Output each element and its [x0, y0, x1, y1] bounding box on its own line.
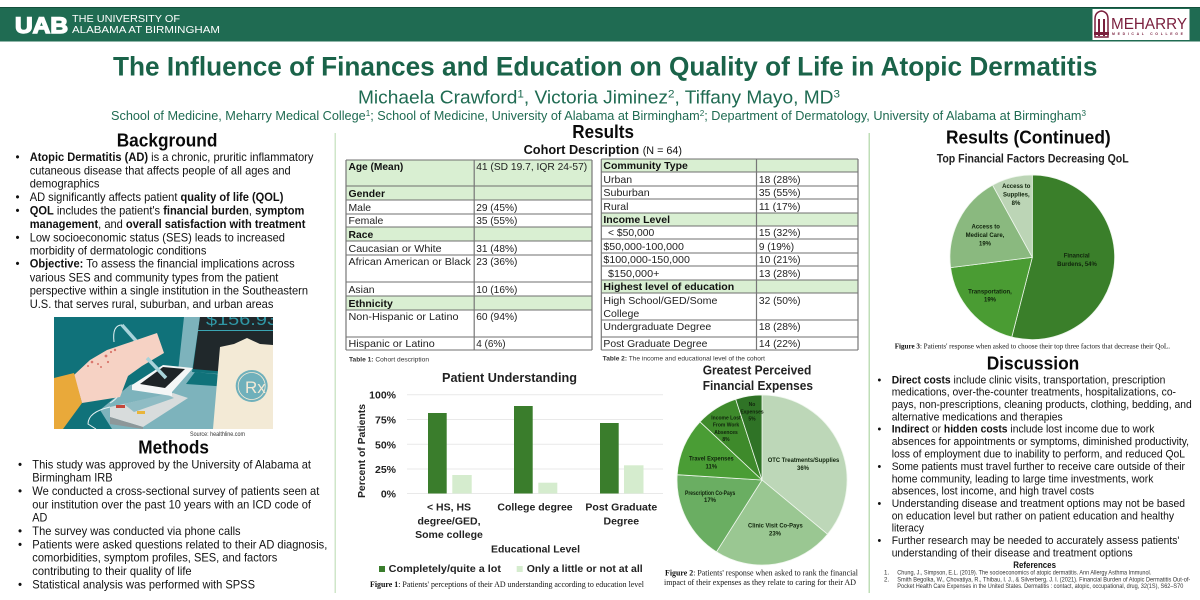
title: The Influence of Finances and Education on Quality of Life in Atopic Dermatitis [113, 51, 1098, 81]
illustration: paying at pharmacy terminal: $156.93 [206, 310, 278, 329]
heading: background: Background [117, 131, 217, 151]
background bullets: QOL includes the patient's financial burden, symptom [30, 204, 304, 217]
table 2: income and education: 13 (28%) [759, 268, 800, 280]
pie 3 labels: 19% [979, 241, 992, 247]
x axis category labels: College degree [497, 502, 573, 514]
pie labels: 23% [769, 532, 782, 538]
bar chart: patient understanding [356, 370, 663, 575]
UAB logo: ALABAMA AT BIRMINGHAM [72, 25, 220, 36]
pie 3 labels: Supplies, [1003, 192, 1030, 198]
panel: results [346, 122, 859, 589]
figure 3 caption: Figure 3: Patients' response when asked to choose their top three factors that decrease their QoL. [895, 342, 1170, 351]
table 2: income and education: 11 (17%) [759, 201, 800, 213]
pie 3 labels: Access to [1002, 184, 1031, 190]
authors: Michaela Crawford [358, 87, 508, 107]
table 2: income and education: Highest level of education [603, 281, 734, 293]
y axis labels: 0% [381, 488, 397, 500]
table 2: income and education: 18 (28%) [759, 174, 800, 186]
table 1: cohort description: Caucasian or White [348, 243, 442, 255]
authors: 1 [517, 88, 524, 100]
authors: , Victoria Jiminez [524, 87, 668, 107]
discussion bullets: literacy [892, 523, 925, 535]
pie labels: 17% [704, 498, 717, 504]
methods bullets: • [18, 538, 22, 551]
background bullets: demographics [30, 178, 100, 191]
Meharry logo [1092, 9, 1190, 40]
table 1: cohort description: African American or Black [348, 256, 472, 268]
pie labels: Absences [714, 430, 738, 436]
background bullets: cutaneous disease that affects people of all ages and [30, 164, 291, 177]
methods bullets: • [18, 458, 22, 471]
discussion bullets: Understanding disease and treatment options may not be based [892, 498, 1185, 510]
methods bullets: Patients were asked questions related to their AD diagnosis, [32, 538, 327, 551]
table 1: cohort description: Male [348, 202, 371, 214]
table 2: income and education: Rural [603, 201, 628, 213]
pie chart: greatest perceived financial expenses [677, 363, 847, 565]
table 1: cohort description: Age (Mean) [348, 161, 403, 173]
bars: only a little or not at all [452, 465, 644, 494]
table 2: income and education: 10 (21%) [759, 254, 800, 266]
legend: Only a little or not at all [527, 563, 643, 575]
pie 3 labels: Transportation, [968, 289, 1012, 295]
pie 3 labels: Access to [972, 224, 1000, 230]
discussion bullets: absences for appointments or symptoms, diminished productivity, [892, 436, 1189, 448]
methods bullets: Statistical analysis was performed with SPSS [32, 578, 255, 591]
UAB logo [15, 13, 220, 38]
discussion bullets: • [878, 498, 882, 510]
pie labels: Travel Expenses [689, 457, 734, 463]
table 1: cohort description: Non-Hispanic or Latino [348, 311, 459, 323]
x axis category labels: < HS, HS [427, 502, 471, 514]
pie labels: 36% [797, 466, 810, 472]
pie 3 labels: 8% [1012, 201, 1021, 207]
discussion bullets: Indirect or hidden costs include lost income due to work [892, 424, 1155, 436]
background bullets: morbidity of dermatologic conditions [30, 245, 207, 258]
y axis labels: 100% [369, 390, 397, 402]
background bullets: Atopic Dermatitis (AD) is a chronic, pruritic inflammatory [30, 151, 314, 164]
background bullets: • [16, 231, 20, 244]
table 2: income and education: < $50,000 [608, 227, 654, 239]
pie slices [677, 395, 847, 565]
table 1: cohort description: Asian [348, 284, 375, 296]
table 2: income and education: 32 (50%) [759, 295, 800, 307]
discussion bullets: pays, non-prescriptions, cleaning products, clothing, bedding, and [892, 399, 1192, 411]
affiliations: 3 [1081, 109, 1087, 118]
discussion bullets: • [878, 374, 882, 386]
pie labels: Income Lost [711, 416, 741, 422]
discussion bullets: on education level but rather on patient education and healthy [892, 510, 1175, 522]
pie labels: Clinic Visit Co-Pays [748, 524, 803, 530]
x axis category labels: Degree [603, 516, 639, 528]
pie labels: Prescription Co-Pays [685, 491, 736, 497]
pie 3 labels [966, 184, 1098, 303]
pie chart: top financial factors decreasing QoL [950, 175, 1115, 340]
x axis title: Educational Level [491, 544, 580, 556]
discussion bullets: medications, over-the-counter treatments, hospitalizations, co- [892, 387, 1176, 399]
table 2: income and education: 18 (28%) [759, 321, 800, 333]
background bullets: • [16, 258, 20, 271]
table 1: cohort description: 41 (SD 19.7, IQR 24-57) [476, 161, 587, 173]
pie labels [685, 402, 840, 538]
discussion bullets: • [878, 461, 882, 473]
pie labels: No [749, 402, 755, 408]
table 1: cohort description: Gender [348, 188, 385, 200]
discussion bullets: alternative medications and therapies [892, 411, 1063, 423]
illustration: paying at pharmacy terminal [54, 310, 278, 429]
table 2: income and education: Undergraduate Degree [603, 321, 711, 333]
column divider left [334, 133, 336, 593]
legend [379, 563, 643, 575]
heading: discussion: Discussion [987, 353, 1079, 373]
heading: results: Results [572, 122, 634, 142]
pie title: Financial Expenses [703, 378, 813, 393]
table 1 caption: Table 1: Cohort description [349, 357, 429, 363]
table 2: income and education: 9 (19%) [759, 241, 794, 253]
authors: 3 [833, 88, 840, 100]
table 2: income and education: Income Level [603, 214, 670, 226]
y axis labels [369, 390, 397, 500]
affiliations: ; School of Medicine, University of Alabama at Birmingham [370, 109, 700, 123]
heading: results continued: Results (Continued) [946, 127, 1111, 147]
subheading: cohort description: Cohort Description (N = 64) [524, 142, 682, 157]
affiliations: 1 [366, 109, 371, 118]
background bullets: Low socioeconomic status (SES) leads to increased [30, 231, 285, 244]
methods bullets: comorbidities, symptom profiles, SES, and factors [32, 552, 277, 565]
UAB logo: UAB [15, 13, 68, 38]
discussion bullets: absences, lost income, and high travel costs [892, 486, 1094, 498]
background bullets: perspective within a single institution in the Southeastern [30, 285, 308, 298]
table 2: income and education: 35 (55%) [759, 187, 800, 199]
table 2: income and education: 15 (32%) [759, 227, 800, 239]
x axis category labels: degree/GED, [417, 516, 481, 528]
background bullets [16, 151, 314, 311]
methods bullets: • [18, 485, 22, 498]
authors: 2 [668, 88, 674, 100]
discussion bullets: • [878, 535, 882, 547]
table 1: cohort description: 10 (16%) [476, 284, 517, 296]
table 2: income and education: Post Graduate Degree [603, 338, 708, 350]
pie labels: 8% [722, 437, 730, 443]
background bullets: Objective: To assess the financial implications across [30, 258, 295, 271]
table 1: cohort description: Race [348, 229, 373, 241]
table 2: income and education: $100,000-150,000 [603, 254, 690, 266]
affiliations: ; Department of Dermatology, University of Alabama at Birmingham [704, 109, 1081, 123]
discussion bullets: Direct costs include clinic visits, transportation, prescription [892, 374, 1165, 386]
table 1: cohort description: 23 (36%) [476, 256, 517, 268]
reference list: Chung, J., Simpson, E.L. (2019). The socioeconomics of atopic dermatitis. Ann Allergy Asthma Immunol. [897, 570, 1152, 577]
table 2: income and education: $150,000+ [608, 268, 659, 280]
y axis title: Percent of Patients [356, 404, 368, 498]
affiliations: School of Medicine, Meharry Medical College [111, 109, 362, 123]
pie title: top financial factors: Top Financial Factors Decreasing QoL [937, 154, 1129, 166]
table 1: cohort description: 60 (94%) [476, 311, 517, 323]
table 2: income and education: Community Type [603, 160, 688, 172]
panel: results continued [895, 127, 1170, 351]
authors: , Tiffany Mayo, MD [674, 87, 833, 107]
table 2: income and education: High School/GED/Some [603, 295, 718, 307]
table 1: cohort description: 35 (55%) [476, 215, 517, 227]
methods bullets: The survey was conducted via phone calls [32, 525, 241, 538]
y axis labels: 25% [375, 464, 397, 476]
methods bullets: • [18, 578, 22, 591]
table 2: income and education: Suburban [603, 187, 650, 199]
y axis labels: 50% [375, 439, 397, 451]
methods bullets: We conducted a cross-sectional survey of patients seen at [32, 485, 320, 498]
table 2: income and education: 14 (22%) [759, 338, 800, 350]
discussion bullets: understanding of their disease and treatment options [892, 547, 1133, 559]
pie labels: 5% [748, 416, 756, 422]
background bullets: • [16, 151, 20, 164]
table 1: cohort description: 31 (48%) [476, 243, 517, 255]
x axis category labels [415, 502, 657, 541]
table 1: cohort description [346, 160, 592, 350]
y axis labels: 75% [375, 415, 397, 427]
heading: methods: Methods [138, 437, 209, 457]
background bullets: • [16, 191, 20, 204]
table 1: cohort description: Female [348, 215, 383, 227]
table 1: cohort description: 4 (6%) [476, 338, 506, 350]
panel: references [884, 560, 1190, 590]
panel: methods [18, 437, 327, 591]
figure 2 caption: Figure 2: Patients' response when asked to rank the financial [665, 568, 859, 578]
reference list: 1. [884, 570, 889, 577]
reference list: 2. [884, 576, 889, 583]
background bullets: various SES and community types from the patient [30, 271, 279, 284]
illustration: paying at pharmacy terminal: Rx [245, 378, 266, 397]
image source: Source: healthline.com [190, 432, 245, 438]
discussion bullets: Further research may be needed to accurately assess patients' [892, 535, 1179, 547]
heading: references: References [1013, 560, 1056, 570]
panel: background [16, 131, 314, 438]
methods bullets: AD [32, 512, 47, 525]
pie title: Greatest Perceived [703, 363, 811, 378]
pie labels: From Work [713, 423, 739, 429]
Meharry logo: MEDICAL COLLEGE [1112, 32, 1184, 36]
UAB logo: THE UNIVERSITY OF [72, 14, 180, 25]
Meharry logo: MEHARRY [1111, 16, 1187, 33]
table 2: income and education: $50,000-100,000 [603, 241, 684, 253]
methods bullets [18, 458, 327, 591]
panel: discussion [878, 353, 1192, 559]
pie 3 labels: Burdens, 54% [1057, 262, 1098, 268]
discussion bullets: • [878, 424, 882, 436]
bars: completely or quite a lot [428, 406, 619, 494]
background bullets: management, and overall satisfaction with treatment [30, 218, 306, 231]
pie 3 labels: 19% [984, 297, 997, 303]
header band [0, 7, 1200, 42]
figure 1 caption: Figure 1: Patients' perceptions of their AD understanding according to education level [370, 579, 645, 589]
methods bullets: • [18, 525, 22, 538]
pie labels: OTC Treatments/Supplies [768, 458, 840, 464]
table 1: cohort description: 29 (45%) [476, 202, 517, 214]
background bullets: U.S. that serves rural, suburban, and urban areas [30, 298, 274, 311]
methods bullets: contributing to their quality of life [32, 565, 192, 578]
reference list [884, 570, 1190, 590]
discussion bullets: Some patients must travel further to receive care outside of their [892, 461, 1185, 473]
discussion bullets: home community, leading to large time investments, work [892, 473, 1154, 485]
pie labels: 11% [705, 465, 718, 471]
table 2: income and education: Urban [603, 174, 632, 186]
x axis category labels: Post Graduate [585, 502, 657, 514]
affiliations: 2 [700, 109, 705, 118]
column divider right [868, 133, 870, 593]
discussion bullets [878, 374, 1192, 559]
table 2 caption: Table 2: The income and educational level of the cohort [603, 357, 765, 363]
background bullets: • [16, 204, 20, 217]
pie title [703, 363, 813, 393]
table 2: income and education [601, 159, 858, 350]
legend: Completely/quite a lot [389, 563, 502, 575]
background bullets: AD significantly affects patient quality of life (QOL) [30, 191, 284, 204]
x axis category labels: Some college [415, 529, 483, 541]
methods bullets: Birmingham IRB [32, 472, 113, 485]
chart title: Patient Understanding [442, 370, 577, 385]
discussion bullets: loss of employment due to inability to perform, and reduced QoL [892, 448, 1185, 460]
table 1: cohort description: Ethnicity [348, 298, 393, 310]
pie 3 labels: Financial [1064, 254, 1090, 260]
table 2: income and education: College [603, 308, 639, 320]
figure 2 caption: impact of their expenses as they relate to caring for their AD [664, 577, 856, 587]
methods bullets: our institution over the past 10 years with an ICD code of [32, 498, 312, 511]
table 1: cohort description: Hispanic or Latino [348, 338, 435, 350]
pie labels: Expenses [740, 409, 764, 415]
figure 2 caption [664, 568, 859, 587]
pie 3 labels: Medical Care, [966, 233, 1005, 239]
methods bullets: This study was approved by the University of Alabama at [32, 458, 312, 471]
